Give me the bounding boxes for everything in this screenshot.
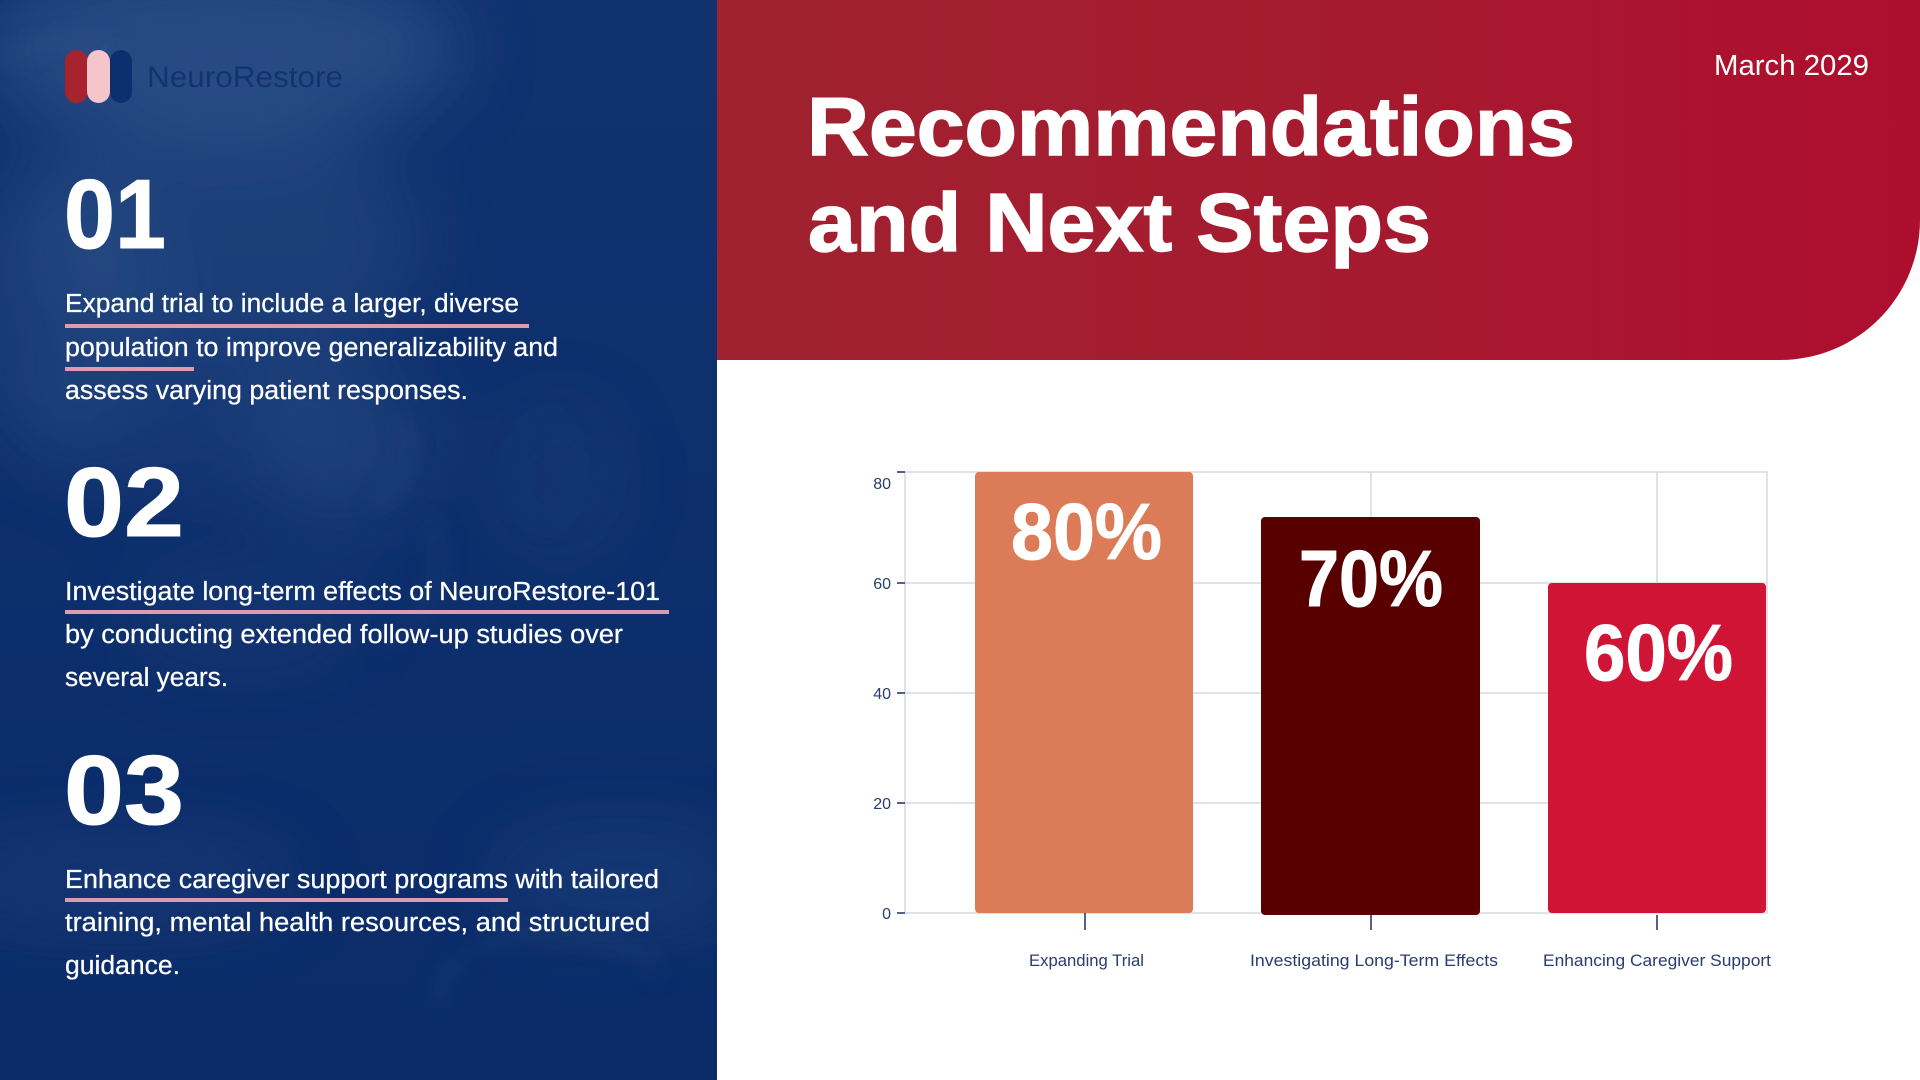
text block 02: Investigate long-term effects of NeuroRestore-101 <box>65 578 660 606</box>
text block 02: several years. <box>65 664 228 692</box>
text block 03 <box>65 866 659 980</box>
logo wordmark: NeuroRestore <box>147 61 343 94</box>
date: March 2029 <box>1714 50 1869 82</box>
text block 03: guidance. <box>65 952 180 980</box>
text block 03: training, mental health resources, and structured <box>65 909 650 937</box>
text block 03: Enhance caregiver support programs with tailored <box>65 866 659 894</box>
text block 02: by conducting extended follow-up studies over <box>65 621 624 649</box>
y-axis ticks and labels: 60 <box>873 576 891 593</box>
y-axis ticks and labels: 20 <box>873 796 891 813</box>
recommendation 02 <box>64 447 669 692</box>
bar: Enhancing Caregiver Support 60%: 60% <box>1584 608 1733 697</box>
panel: left navy photo panel <box>0 0 750 1080</box>
recommendation 03 <box>64 735 659 980</box>
text block 01: assess varying patient responses. <box>65 377 468 405</box>
icon: three capsule bars <box>65 50 132 103</box>
number 03: 03 <box>64 735 184 845</box>
recommendation 01 <box>64 159 558 405</box>
text block 01 <box>65 290 558 405</box>
text block 02 <box>65 578 669 692</box>
x-axis ticks and labels: Expanding Trial <box>1029 952 1144 970</box>
y-axis ticks and labels: 40 <box>873 686 891 703</box>
bar: Investigating Long-Term Effects 70%: 70% <box>1299 534 1443 623</box>
text block 01: population to improve generalizability and <box>65 334 558 362</box>
title <box>807 80 1575 269</box>
y-axis ticks and labels: 80 <box>873 476 891 493</box>
y-axis ticks and labels <box>873 472 905 923</box>
text block 01: Expand trial to include a larger, diverse <box>65 290 519 318</box>
x-axis ticks and labels: Investigating Long-Term Effects <box>1250 952 1498 970</box>
panel: red header <box>717 0 1920 360</box>
number 01: 01 <box>64 159 166 269</box>
x-axis ticks and labels: Enhancing Caregiver Support <box>1543 952 1771 970</box>
chart grid and axes <box>905 472 1767 913</box>
logo: NeuroRestore <box>65 50 343 103</box>
bar chart <box>873 472 1771 970</box>
number 02: 02 <box>64 447 184 557</box>
title: and Next Steps <box>808 176 1431 269</box>
bar: Investigating Long-Term Effects 70% <box>1261 517 1480 915</box>
x-axis ticks and labels <box>1029 913 1771 970</box>
bar: Expanding Trial 80%: 80% <box>1011 487 1162 576</box>
bar: Expanding Trial 80% <box>975 472 1193 913</box>
y-axis ticks and labels: 0 <box>882 906 891 923</box>
title: Recommendations <box>807 80 1575 173</box>
bar: Enhancing Caregiver Support 60% <box>1548 583 1766 913</box>
